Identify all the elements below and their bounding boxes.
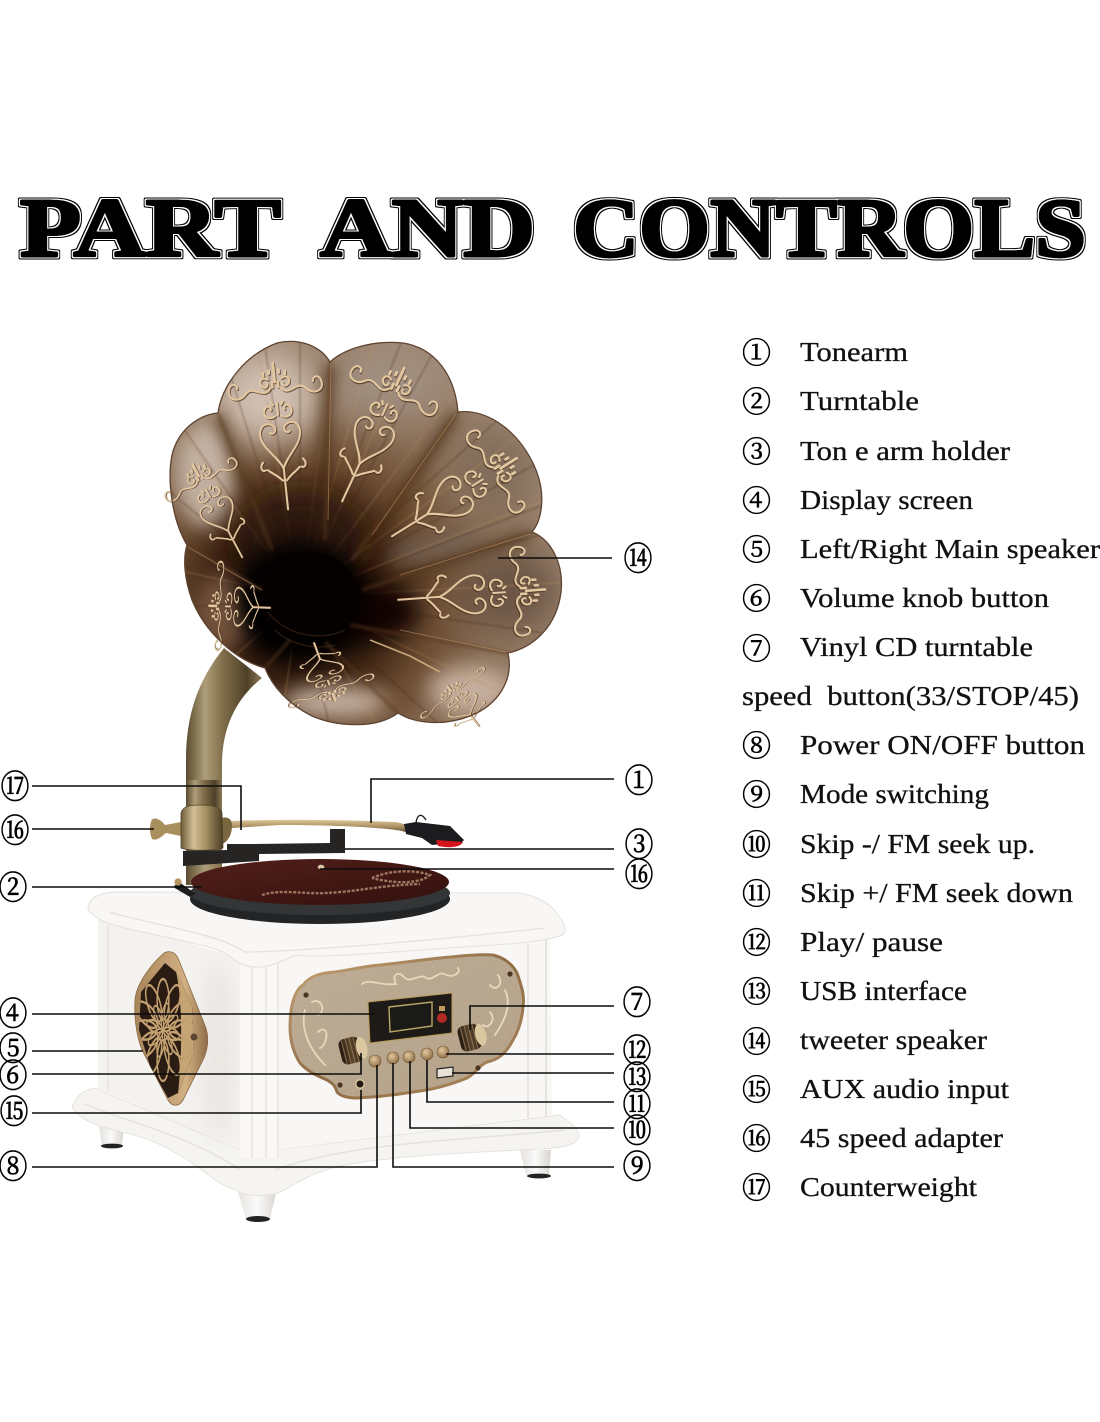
legend item 2: ② [742, 380, 771, 421]
legend item 15: AUX audio input [800, 1074, 1010, 1104]
seam shading [218, 365, 530, 590]
legend item 16: ⑯ [742, 1117, 771, 1158]
legend item 6 [742, 577, 1050, 618]
legend item 10: ⑩ [742, 823, 771, 864]
legend item 1: ① [742, 331, 771, 372]
callout numbers: ⑪ [623, 1079, 651, 1125]
callout numbers: ⑨ [623, 1141, 651, 1187]
legend item 5: Left/Right Main speaker [800, 534, 1100, 564]
callout lines [32, 558, 614, 1167]
side speaker [130, 950, 210, 1105]
legend item 11: Skip +/ FM seek down [800, 878, 1074, 908]
legend item 7: speed button(33/STOP/45) [742, 681, 1079, 711]
legend item 10: Skip -/ FM seek up. [800, 829, 1035, 859]
horn ornaments [157, 348, 548, 751]
legend item 17: Counterweight [800, 1172, 978, 1202]
legend item 11 [742, 872, 1074, 913]
legend item 15: ⑮ [742, 1068, 771, 1109]
callout numbers: ⑮ [0, 1086, 28, 1132]
legend item 13 [742, 970, 967, 1011]
corner pillar [240, 962, 278, 1158]
legend item 5: ⑤ [742, 528, 771, 569]
legend item 10 [742, 823, 1035, 864]
aux jack [356, 1080, 364, 1088]
legend item 1: Tonearm [800, 337, 908, 367]
callout numbers: ⑬ [623, 1052, 651, 1098]
front panel [275, 930, 552, 1150]
horn streaks [172, 343, 542, 722]
plate scrolls [304, 968, 508, 1065]
legend item 13: ⑬ [742, 970, 771, 1011]
callout numbers: ⑩ [623, 1105, 651, 1151]
legend item 8: ⑧ [742, 724, 771, 765]
usb port [437, 1067, 453, 1078]
title [20, 182, 1086, 275]
callout numbers: ⑰ [1, 761, 29, 807]
buttons [369, 1046, 449, 1067]
legend item 12 [742, 921, 943, 962]
control plate [290, 955, 524, 1098]
legend item 16 [742, 1117, 1003, 1158]
legend item 15 [742, 1068, 1010, 1109]
legend item 2: Turntable [800, 386, 919, 416]
legend item 9: ⑨ [742, 773, 771, 814]
cabinet [72, 892, 579, 1222]
legend item 12: Play/ pause [800, 927, 943, 957]
callout numbers: ⑯ [1, 805, 29, 851]
top plate [88, 892, 565, 967]
callout numbers: ③ [625, 819, 653, 865]
gramophone illustration [72, 340, 580, 1222]
arm [232, 820, 411, 832]
turntable platter [173, 859, 450, 924]
legend item 4: ④ [742, 479, 771, 520]
callout numbers: ⑫ [623, 1025, 651, 1071]
side panel [98, 915, 245, 1150]
legend item 9: Mode switching [800, 779, 989, 809]
title: AND [320, 182, 535, 275]
base [72, 1088, 579, 1195]
legend item 6: ⑥ [742, 577, 771, 618]
legend item 17 [742, 1166, 978, 1207]
legend item 3 [742, 430, 1010, 471]
title: CONTROLS [573, 182, 1086, 275]
legend item 3: ③ [742, 430, 771, 471]
legend item 7: Vinyl CD turntable [800, 632, 1033, 662]
horn [164, 340, 562, 728]
counterweight [150, 818, 181, 840]
red stylus [436, 840, 463, 847]
legend item 17: ⑰ [742, 1166, 771, 1207]
legend item 16: 45 speed adapter [800, 1123, 1003, 1153]
legend item 4 [742, 479, 974, 520]
display screen [368, 993, 452, 1043]
legend item 8 [742, 724, 1086, 765]
callout numbers: ⑦ [623, 977, 651, 1023]
legend item 6: Volume knob button [800, 583, 1050, 613]
callout numbers: ⑭ [624, 533, 652, 579]
legend item 3: Ton e arm holder [800, 436, 1010, 466]
knobs [337, 1021, 489, 1066]
feet [99, 1125, 551, 1222]
legend item 5 [742, 528, 1100, 569]
callout numbers [0, 533, 653, 1187]
collar [181, 805, 223, 850]
neck tube [186, 648, 262, 885]
legend item 14: ⑭ [742, 1020, 771, 1061]
legend item 14: tweeter speaker [800, 1025, 987, 1055]
legend item 13: USB interface [800, 976, 967, 1006]
legend list [742, 331, 1100, 1207]
legend item 7: ⑦ [742, 627, 771, 668]
legend item 14 [742, 1020, 987, 1061]
callout numbers: ⑯ [625, 849, 653, 895]
legend item 2 [742, 380, 919, 421]
legend item 11: ⑪ [742, 872, 771, 913]
legend item 4: Display screen [800, 485, 974, 515]
black mount [183, 829, 345, 866]
legend item 1 [742, 331, 908, 372]
tonearm assembly [150, 780, 464, 866]
legend item 12: ⑫ [742, 921, 771, 962]
legend item 8: Power ON/OFF button [800, 730, 1086, 760]
legend item 9 [742, 773, 989, 814]
cartridge [404, 822, 464, 845]
legend item 7 [742, 627, 1079, 711]
callout numbers: ① [625, 755, 653, 801]
title: PART [20, 182, 281, 275]
